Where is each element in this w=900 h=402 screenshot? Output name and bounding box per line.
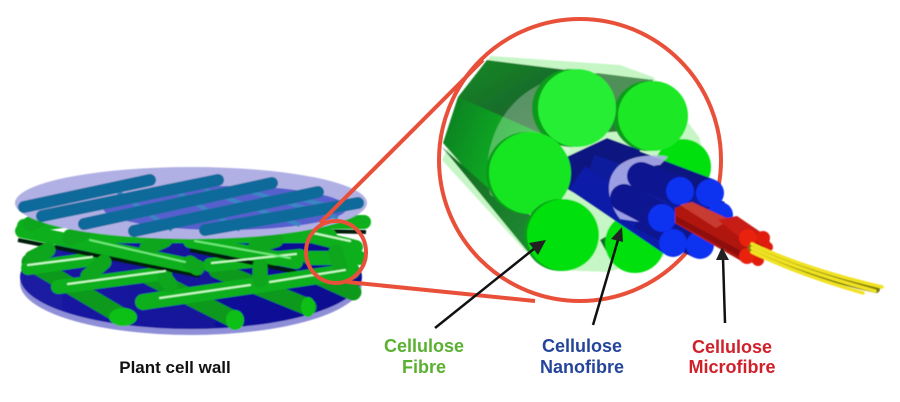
- disc inner shading: [103, 186, 347, 230]
- label: cellulose nanofibre: Cellulose: [542, 336, 622, 356]
- arrow: cellulose fibre: [435, 240, 546, 328]
- translucent nanofibre ring: [609, 155, 668, 222]
- cellulose fibre sleeve: [442, 56, 710, 272]
- nanofibre rear faces: [659, 179, 733, 259]
- arrow: cellulose microfibre: [716, 247, 729, 323]
- label: cellulose nanofibre: Nanofibre: [540, 357, 624, 377]
- top translucent disc: [15, 167, 367, 239]
- label: plant cell wall: Plant cell wall: [119, 358, 231, 377]
- connector lines from small circle to large circle: [320, 60, 535, 301]
- cellulose fibre bodies: [442, 60, 653, 262]
- lower diagonal rods: [30, 262, 353, 320]
- yellow fibrils: [752, 244, 882, 293]
- label: cellulose microfibre: Microfibre: [688, 357, 776, 377]
- fibre bundle: [442, 56, 882, 293]
- top layer shadows: [18, 231, 366, 276]
- thin cross fibres: [118, 188, 345, 230]
- large magnifier circle: [439, 19, 721, 301]
- arrow: cellulose nanofibre: [593, 227, 623, 325]
- cellulose nanofibre back bodies: [560, 138, 720, 245]
- small magnifier circle: [306, 221, 366, 283]
- short cross rods: [30, 218, 340, 285]
- label: cellulose microfibre: Cellulose: [692, 337, 772, 357]
- plant cell wall diagram: [15, 167, 367, 335]
- front green fibre faces: [486, 69, 616, 271]
- front long rod: [143, 271, 352, 302]
- rear green fibre faces: [605, 81, 711, 273]
- cellulose microfibre bundle: [675, 202, 773, 266]
- front nanofibres: [624, 176, 680, 218]
- translucent fibre ring: [487, 80, 570, 215]
- blue-teal fibres on top disc: [24, 180, 358, 231]
- label: cellulose fibre: Cellulose: [384, 336, 464, 356]
- rod ends: [109, 297, 315, 330]
- label: cellulose fibre: Fibre: [402, 357, 446, 377]
- nanofibre front faces: [648, 177, 694, 232]
- bottom disc: [20, 225, 362, 335]
- middle rods: [28, 256, 360, 287]
- green fibre layer: [18, 218, 366, 330]
- rod highlights: [28, 233, 350, 298]
- top layer rods: [22, 220, 364, 267]
